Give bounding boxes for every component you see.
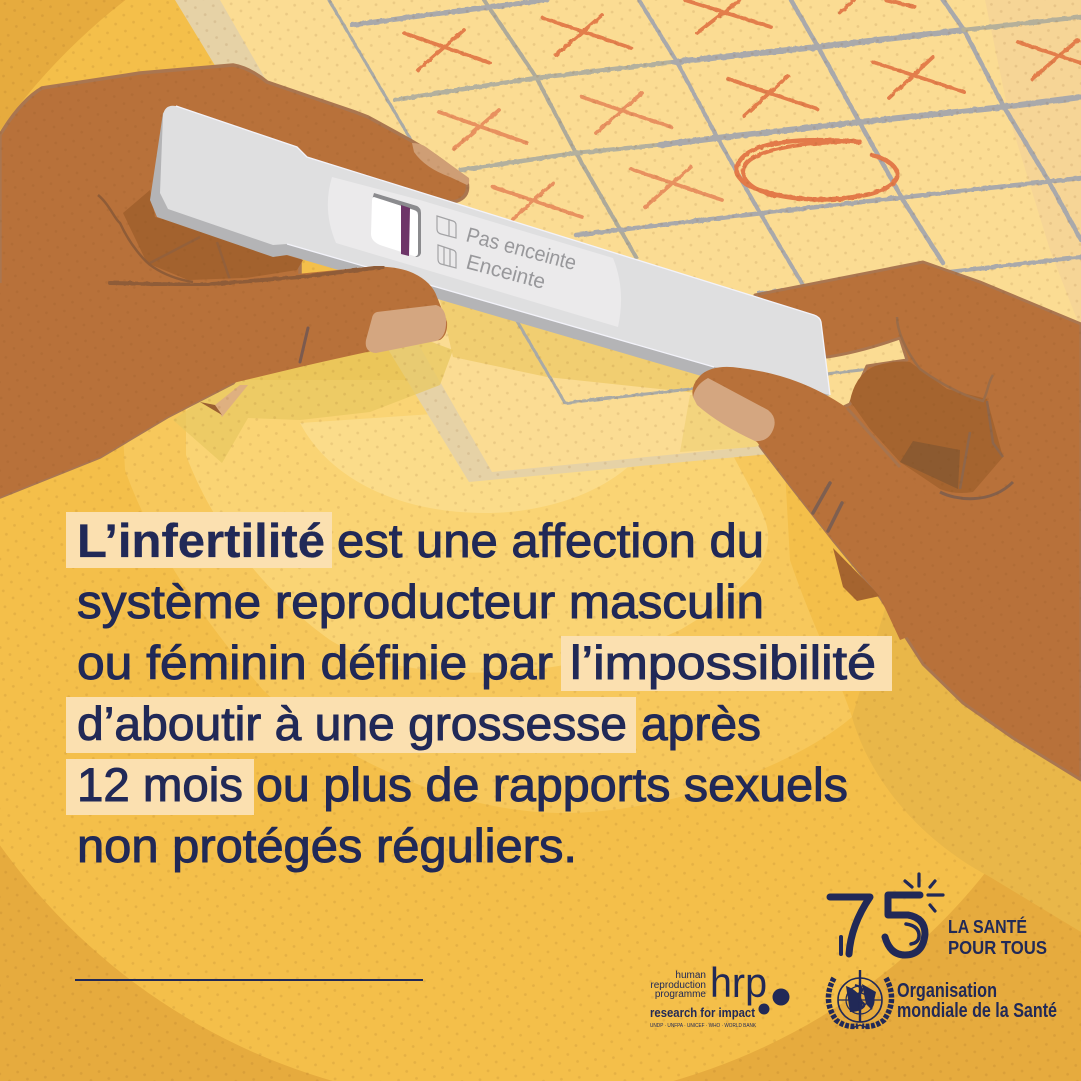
crossed-out calendar days xyxy=(404,0,1081,220)
main statement text: non protégés réguliers. xyxy=(77,819,577,872)
highlight: l'infertilité xyxy=(66,512,332,568)
slogan: la santé pour tous: LA SANTÉ xyxy=(948,916,1027,937)
logo: HRP: human xyxy=(675,970,706,981)
pregnancy test strip xyxy=(150,106,830,405)
legend text: Pas enceinte xyxy=(464,224,579,275)
main statement text: L’infertilité xyxy=(77,514,325,567)
legend icons xyxy=(437,216,456,268)
main statement text: système reproducteur masculin xyxy=(77,575,764,628)
strip edge highlight xyxy=(176,106,830,395)
circled calendar day xyxy=(737,140,897,199)
slogan: la santé pour tous: POUR TOUS xyxy=(948,938,1047,958)
strip centre panel xyxy=(328,177,621,327)
logo: HRP: research for impact xyxy=(650,1006,756,1020)
logo: WHO emblem xyxy=(828,970,892,1028)
calendar grid lines xyxy=(329,0,1081,403)
legend text: Enceinte xyxy=(464,251,548,294)
highlight: l'impossibilité xyxy=(561,636,892,691)
divider rule xyxy=(75,979,423,981)
highlight: 12 mois xyxy=(66,759,254,815)
highlight: d'aboutir à une grossesse xyxy=(66,697,636,753)
right hand: palm and upper finger xyxy=(755,262,1081,780)
WHO wordmark xyxy=(897,980,1057,1022)
main statement text: après xyxy=(641,697,761,750)
logo: 75 years xyxy=(830,874,943,955)
right thumb xyxy=(692,367,1000,640)
logo: HRP: hrp xyxy=(710,959,767,1006)
main statement text: ou féminin définie par xyxy=(77,636,553,689)
WHO wordmark: Organisation xyxy=(897,980,997,1002)
result window xyxy=(371,193,421,257)
strip side shadow xyxy=(150,107,830,405)
left thumb xyxy=(0,195,447,497)
strip face xyxy=(160,106,830,395)
logo: HRP: programme xyxy=(655,989,706,1000)
main statement text: l’impossibilité xyxy=(570,636,876,689)
left hand: palm and index finger xyxy=(0,65,469,497)
logo: HRP xyxy=(650,959,790,1029)
main statement text: est une affection du xyxy=(337,514,764,567)
main statement text xyxy=(77,514,876,872)
main statement text: 12 mois xyxy=(77,758,243,811)
logo: HRP: UNDP · UNFPA · UNICEF · WHO · WORLD BANK xyxy=(650,1023,756,1029)
main statement text: d’aboutir à une grossesse xyxy=(77,697,627,750)
logo: HRP: reproduction xyxy=(650,980,706,991)
slogan: la santé pour tous xyxy=(948,916,1047,958)
main statement text: ou plus de rapports sexuels xyxy=(256,758,848,811)
calendar paper xyxy=(173,0,1081,482)
